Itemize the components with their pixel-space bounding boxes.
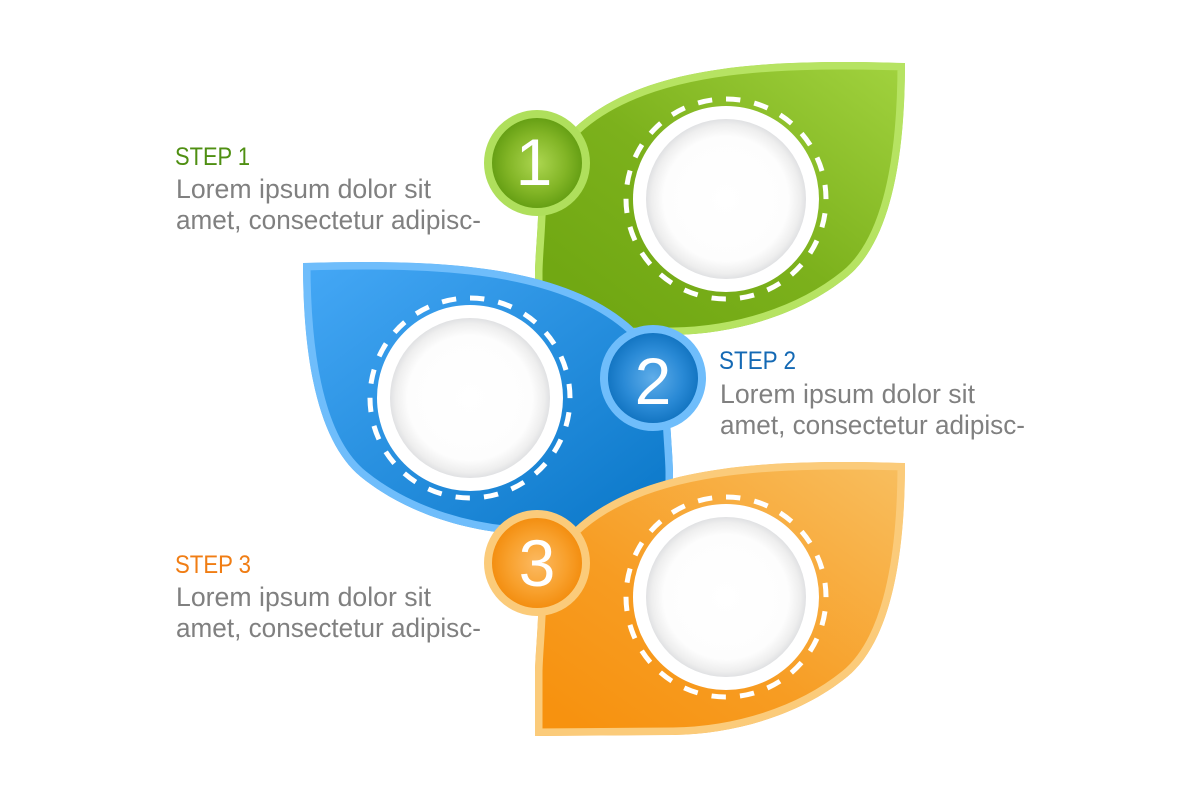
panel: orange leaf — [535, 462, 905, 736]
text block: step 3 — [175, 551, 481, 643]
text block: step 1: STEP 1 — [175, 143, 250, 171]
inner disc blue — [390, 318, 550, 478]
text block: step 3: STEP 3 — [175, 551, 251, 579]
text block: step 1: amet, consectetur adipisc- — [176, 205, 481, 235]
number badge 3 — [488, 514, 586, 612]
text block: step 2: amet, consectetur adipisc- — [720, 410, 1025, 440]
text block: step 1 — [175, 143, 481, 235]
text block: step 2 — [719, 347, 1025, 440]
white circle blue — [377, 305, 563, 491]
text block: step 2: Lorem ipsum dolor sit — [720, 379, 975, 409]
white circle green — [633, 106, 819, 292]
number badge 3: 3 — [519, 526, 555, 600]
leaf shape orange — [535, 462, 905, 736]
number badge 1: 1 — [516, 125, 552, 199]
number badge 2 — [604, 329, 702, 427]
text block: step 3: amet, consectetur adipisc- — [176, 613, 481, 643]
stitched ring green — [626, 99, 826, 299]
panel: blue leaf — [303, 262, 673, 536]
text block: step 2: STEP 2 — [719, 347, 796, 375]
leaf shape green — [535, 62, 905, 336]
stitched ring orange — [626, 497, 826, 697]
inner disc green — [646, 119, 806, 279]
white circle orange — [633, 504, 819, 690]
number badge 1 — [488, 114, 586, 212]
panel: green leaf — [535, 62, 905, 336]
text block: step 1: Lorem ipsum dolor sit — [176, 174, 431, 204]
leaf shape blue — [303, 262, 673, 536]
inner disc orange — [646, 517, 806, 677]
stitched ring blue — [370, 298, 570, 498]
number badge 2: 2 — [635, 344, 671, 418]
text block: step 3: Lorem ipsum dolor sit — [176, 582, 431, 612]
